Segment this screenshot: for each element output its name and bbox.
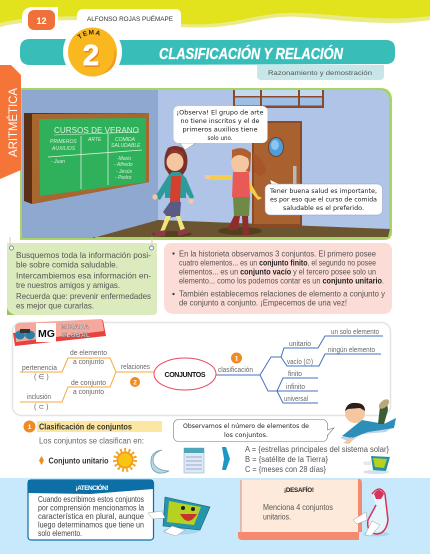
floor bbox=[93, 220, 390, 238]
green note bbox=[7, 237, 157, 315]
green note: Intercambiemos esa información en- bbox=[16, 272, 151, 280]
bottom band bbox=[0, 478, 430, 554]
girl with teal jacket bbox=[152, 146, 194, 237]
author tab bbox=[77, 9, 181, 27]
set definitions: B = {satélite de la Tierra} bbox=[245, 455, 328, 464]
attention box: por comprensión mencionamos la bbox=[38, 504, 145, 512]
window bbox=[233, 90, 324, 108]
speech bubble: arte: ¡Observa! El grupo de arte bbox=[176, 110, 264, 116]
girl with red vest bbox=[205, 148, 266, 235]
blue branches: clasificación bbox=[215, 336, 383, 403]
mind map labels: finito bbox=[288, 371, 302, 378]
desafío scroll bbox=[238, 479, 362, 540]
speech bubble: salud: Tener buena salud es importante, bbox=[269, 188, 377, 195]
blackboard: - Pedro bbox=[115, 175, 132, 181]
icon: calendar bbox=[184, 448, 204, 473]
mind map labels: un solo elemento bbox=[331, 329, 379, 336]
topic badge: TEMA bbox=[77, 30, 100, 38]
mind map labels: pertenencia bbox=[22, 365, 57, 372]
set definitions: A = {estrellas principales del sistema solar} bbox=[245, 445, 389, 454]
blackboard: - Alfredo bbox=[114, 162, 133, 168]
section intro text: Los conjuntos se clasifican en: bbox=[39, 436, 144, 446]
speech bubble: arte: primeros auxilios tiene bbox=[182, 126, 258, 134]
orange branches: relaciones bbox=[20, 358, 154, 402]
subject tab: ARITMÉTICA bbox=[7, 88, 20, 157]
topic badge: 2 bbox=[83, 40, 99, 72]
blackboard: CURSOS DE VERANO bbox=[54, 126, 139, 135]
wall left bbox=[22, 90, 158, 238]
speech bubble: observamos: Observamos el número de elementos de bbox=[183, 422, 309, 430]
mind map labels: infinito bbox=[286, 384, 305, 391]
green note: Busquemos toda la información posi- bbox=[16, 251, 151, 260]
green note: ble sobre comida saludable. bbox=[16, 260, 118, 270]
icon: sun bbox=[115, 450, 135, 470]
wall right bbox=[22, 90, 389, 237]
section heading bbox=[24, 420, 162, 432]
title: CLASIFICACIÓN Y RELACIÓN bbox=[159, 44, 343, 63]
mirada global tab bbox=[13, 319, 106, 346]
mind map panel bbox=[12, 319, 390, 416]
marker 1: 1 bbox=[235, 356, 239, 362]
title bar bbox=[20, 39, 395, 65]
conjuntos ellipse bbox=[154, 358, 216, 390]
attention box: luego determinamos que tiene un bbox=[38, 520, 144, 530]
green note: es mejor que curarlas. bbox=[16, 302, 94, 310]
mind map labels: de conjunto bbox=[71, 380, 106, 387]
blackboard: - Juan bbox=[51, 159, 65, 165]
attention box: solo elemento. bbox=[38, 529, 82, 538]
pink introduction: de conjunto a conjunto. ¡Empecemos de una vez! bbox=[179, 298, 347, 308]
mind map labels: ( ⊂ ) bbox=[34, 404, 48, 411]
pink introduction: En la historieta observamos 3 conjuntos. El primero posee bbox=[179, 250, 376, 258]
blackboard: AUXILIOS bbox=[51, 146, 76, 152]
marker 2 bbox=[130, 377, 140, 387]
paperclip character bbox=[353, 489, 389, 536]
subtitle tab bbox=[257, 65, 384, 80]
icon: small tv bbox=[363, 456, 390, 474]
blackboard: ARTE bbox=[87, 137, 102, 143]
mind map labels: relaciones bbox=[121, 364, 150, 371]
topic badge bbox=[63, 28, 122, 76]
door bbox=[252, 121, 302, 227]
mind map labels: ningún elemento bbox=[328, 347, 375, 354]
subtitle tab: Razonamiento y demostración bbox=[268, 70, 372, 77]
comic panel bbox=[20, 88, 392, 240]
desafío scroll: unitarios. bbox=[263, 512, 291, 522]
set definitions bbox=[245, 445, 389, 474]
speech bubble: arte: no tiene inscritos y el de bbox=[180, 118, 260, 125]
mind map labels: inclusión bbox=[27, 394, 51, 401]
attention box: Cuando escribimos estos conjuntos bbox=[38, 495, 144, 504]
blackboard: - Jesús bbox=[116, 169, 133, 175]
mind map labels: de elemento bbox=[70, 350, 107, 357]
blackboard: SALUDABLE bbox=[111, 143, 141, 149]
desafío scroll: Menciona 4 conjuntos bbox=[263, 503, 333, 512]
icon: moon bbox=[151, 450, 169, 473]
section heading: Clasificación de conjuntos bbox=[39, 422, 133, 432]
speech bubble: observamos: los conjuntos. bbox=[224, 432, 268, 439]
pink introduction: elemento... como los podemos contar es un conjunto unitario. bbox=[179, 276, 384, 286]
pink introduction bbox=[164, 243, 392, 314]
blackboard bbox=[24, 113, 149, 204]
mind map labels: ( ∈ ) bbox=[34, 374, 49, 381]
tv character bbox=[148, 497, 210, 536]
pink introduction: elementos... es un conjunto vacío y el tercero posee solo un bbox=[179, 268, 376, 276]
speech bubble: arte bbox=[174, 106, 268, 150]
blackboard: PRIMEROS bbox=[50, 139, 77, 145]
speech bubble: salud bbox=[265, 180, 382, 215]
speech bubble: salud: es por eso que el curso de comida bbox=[270, 196, 377, 204]
blackboard: -Mario bbox=[117, 156, 131, 162]
green note: Recuerda que: prevenir enfermedades bbox=[16, 292, 151, 301]
page number bbox=[22, 7, 58, 32]
mind map labels: vacío (∅) bbox=[287, 359, 313, 366]
page number: 12 bbox=[36, 16, 47, 26]
attention box: característica en plural, aunque bbox=[38, 512, 144, 521]
pink introduction: cuatro elementos... es un conjunto finito, el segundo no posee bbox=[179, 258, 376, 268]
mirada global tab: MIRADA bbox=[61, 324, 89, 331]
topic badge: 2 bbox=[84, 42, 100, 74]
speech bubble: salud: saludable es el preferido. bbox=[283, 205, 364, 212]
speech bubble: observamos bbox=[174, 420, 334, 442]
attention box: ¡ATENCIÓN! bbox=[76, 483, 108, 492]
icon: blue arrow bbox=[222, 447, 230, 470]
section heading: 1 bbox=[28, 424, 32, 431]
green note: tre nuestros amigos y amigas. bbox=[16, 281, 120, 290]
mind map labels: universal bbox=[284, 396, 308, 403]
mind map labels: unitario bbox=[289, 341, 311, 348]
speech bubble: arte: solo uno. bbox=[208, 135, 233, 142]
mind map labels: clasificación bbox=[218, 367, 253, 374]
mirada global tab: MG bbox=[38, 329, 55, 340]
mind map labels bbox=[22, 329, 379, 411]
attention box bbox=[28, 480, 154, 540]
marker 1 bbox=[231, 352, 242, 364]
marker 2: 2 bbox=[133, 380, 137, 386]
desafío scroll: ¡DESAFÍO! bbox=[284, 485, 314, 494]
author tab: ALFONSO ROJAS PUÉMAPE bbox=[87, 14, 173, 23]
set definitions: C = {meses con 28 días} bbox=[245, 465, 326, 474]
subject tab bbox=[0, 65, 21, 179]
conjuntos ellipse: CONJUNTOS bbox=[164, 372, 206, 379]
mind map labels: a conjunto bbox=[73, 359, 104, 366]
conjunto unitario label: Conjunto unitario bbox=[48, 456, 109, 466]
pink introduction: También establecemos relaciones de elemento a conjunto y bbox=[179, 290, 385, 298]
header band bbox=[0, 0, 430, 28]
mirada global tab: GLOBAL bbox=[61, 332, 90, 339]
mind map labels: a conjunto bbox=[73, 389, 104, 396]
lying boy bbox=[340, 397, 396, 444]
blackboard: COMIDA bbox=[115, 137, 136, 143]
